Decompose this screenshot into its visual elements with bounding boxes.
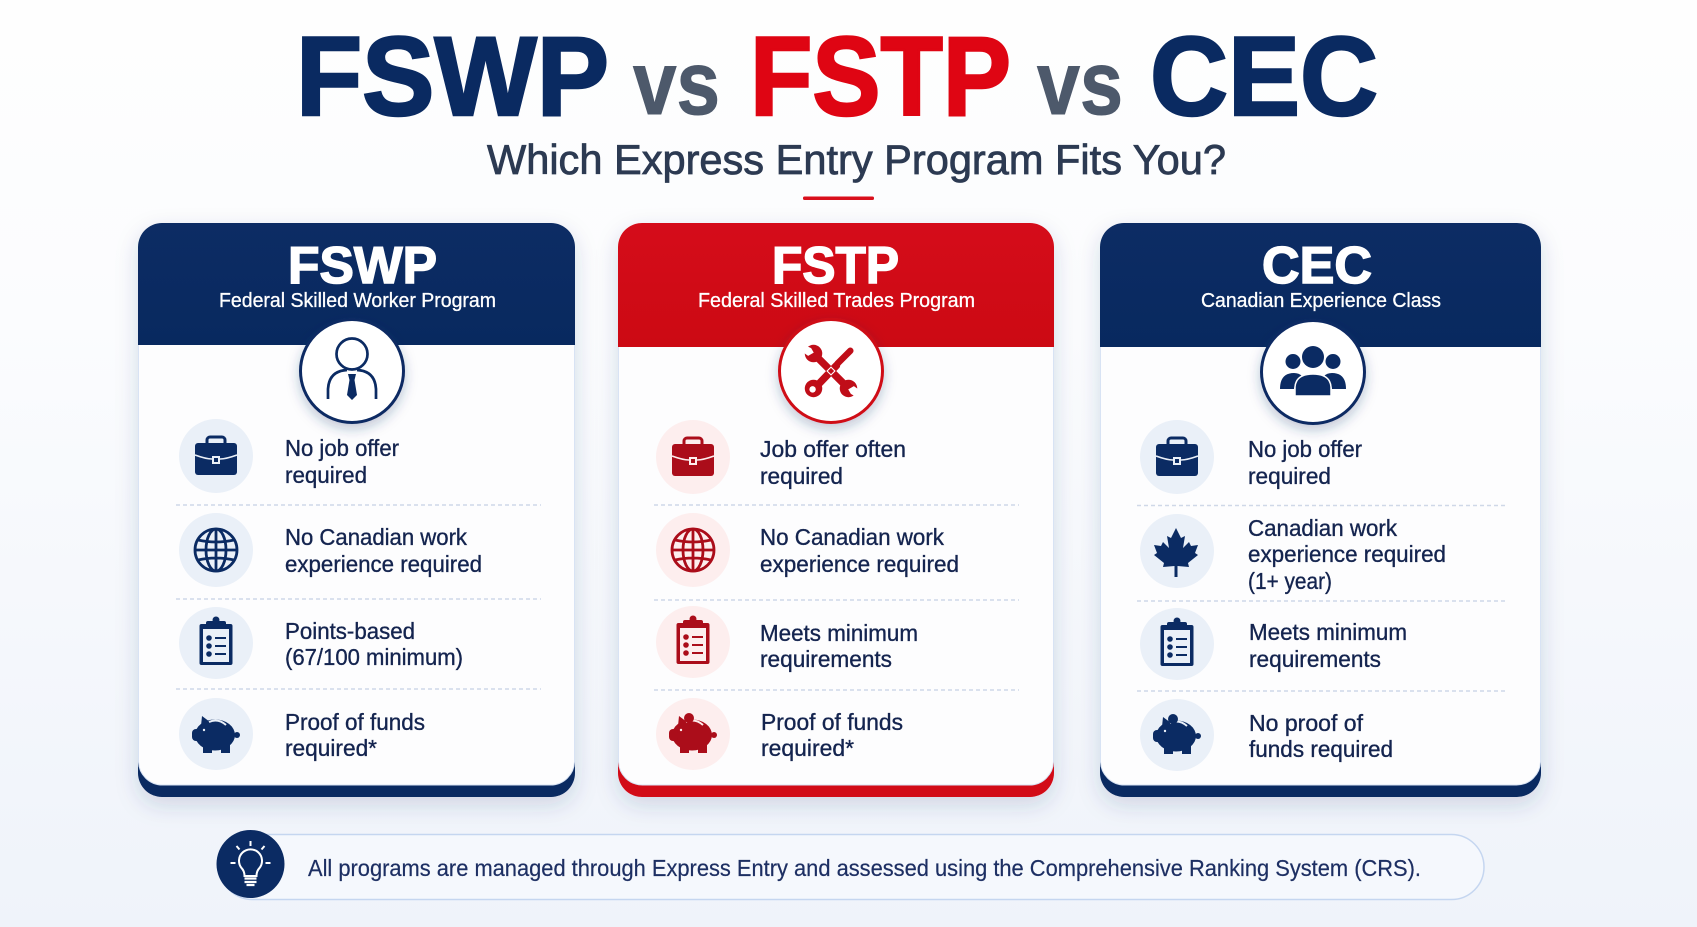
footer text: All programs are managed through Express Entry and assessed using the Comprehensive Ranking System (CRS). — [308, 855, 1421, 881]
card base bar — [618, 400, 1054, 797]
title: FSWP — [296, 14, 609, 139]
title: vs — [1037, 34, 1123, 134]
icon: wrench and screwdriver — [780, 320, 882, 422]
heading: FSTP: FSTP — [772, 237, 899, 295]
icon: worker with tie — [300, 320, 404, 422]
row: proof of funds: Proof of funds — [761, 709, 903, 735]
card body — [1100, 300, 1540, 785]
row: minimum requirements — [1140, 608, 1407, 680]
row: Canadian work experience: Canadian work — [1248, 515, 1397, 541]
subheading: Federal Skilled Trades Program — [698, 290, 975, 312]
row: Canadian work experience: (1+ year) — [1248, 568, 1332, 594]
footer note — [216, 830, 1484, 900]
row: minimum requirements: Meets minimum — [1249, 619, 1407, 645]
row: proof of funds: required* — [761, 735, 854, 761]
row: points: (67/100 minimum) — [285, 644, 463, 670]
row: no proof of funds — [1140, 699, 1393, 771]
title: vs — [633, 34, 720, 134]
row: Canadian work experience: No Canadian work — [760, 524, 944, 550]
card body — [618, 300, 1054, 785]
row: job offer: Job offer often — [760, 436, 906, 462]
row: job offer — [179, 419, 399, 493]
footer pill — [220, 834, 1484, 900]
row: Canadian work experience: experience required — [1248, 541, 1446, 567]
subtitle: Which Express Entry Program Fits You? — [487, 136, 1226, 183]
row: proof of funds: Proof of funds — [285, 709, 425, 735]
row: job offer — [1140, 420, 1362, 494]
heading: FSWP: FSWP — [288, 237, 437, 295]
row: job offer — [656, 420, 906, 494]
panel: FSWP — [138, 223, 575, 797]
row: proof of funds — [179, 698, 425, 770]
row: job offer: required — [760, 463, 843, 489]
title: FSTP — [750, 14, 1011, 139]
row: proof of funds — [656, 698, 903, 770]
row: minimum requirements: Meets minimum — [760, 620, 918, 646]
row: minimum requirements: requirements — [760, 646, 892, 672]
row: job offer: No job offer — [1248, 436, 1362, 462]
icon: maple leaf — [1154, 528, 1198, 577]
panel: FSTP — [618, 223, 1054, 797]
panel: CEC — [1100, 223, 1541, 797]
row: Canadian work experience — [1140, 514, 1446, 594]
card header — [618, 223, 1054, 347]
row: Canadian work experience: experience required — [760, 551, 959, 577]
card shadow — [618, 223, 1054, 797]
title accent line — [803, 196, 874, 200]
row: no proof of funds: funds required — [1249, 736, 1393, 762]
card shadow — [138, 223, 575, 797]
row: job offer: required — [1248, 463, 1331, 489]
row: Canadian work experience: experience required — [285, 551, 482, 577]
row: no proof of funds: No proof of — [1249, 710, 1364, 736]
icon: group of people — [1262, 320, 1364, 424]
row: Canadian work experience — [179, 513, 482, 587]
row: job offer: required — [285, 462, 367, 488]
row: Canadian work experience — [656, 513, 959, 587]
row: points — [179, 607, 463, 679]
row: minimum requirements: requirements — [1249, 646, 1381, 672]
title — [296, 14, 1378, 139]
card header — [1100, 223, 1541, 347]
heading: CEC: CEC — [1262, 237, 1372, 295]
card base bar — [138, 400, 575, 797]
card shadow — [1100, 223, 1541, 797]
card body — [138, 300, 574, 785]
subheading: Federal Skilled Worker Program — [219, 290, 496, 312]
subheading: Canadian Experience Class — [1201, 290, 1441, 312]
card base bar — [1100, 400, 1541, 797]
row: proof of funds: required* — [285, 735, 377, 761]
row: minimum requirements — [656, 606, 918, 678]
row: job offer: No job offer — [285, 435, 399, 461]
title: CEC — [1150, 14, 1378, 139]
icon: light bulb — [216, 830, 284, 898]
row: points: Points-based — [285, 618, 415, 644]
card header — [138, 223, 575, 345]
row: Canadian work experience: No Canadian work — [285, 524, 467, 550]
